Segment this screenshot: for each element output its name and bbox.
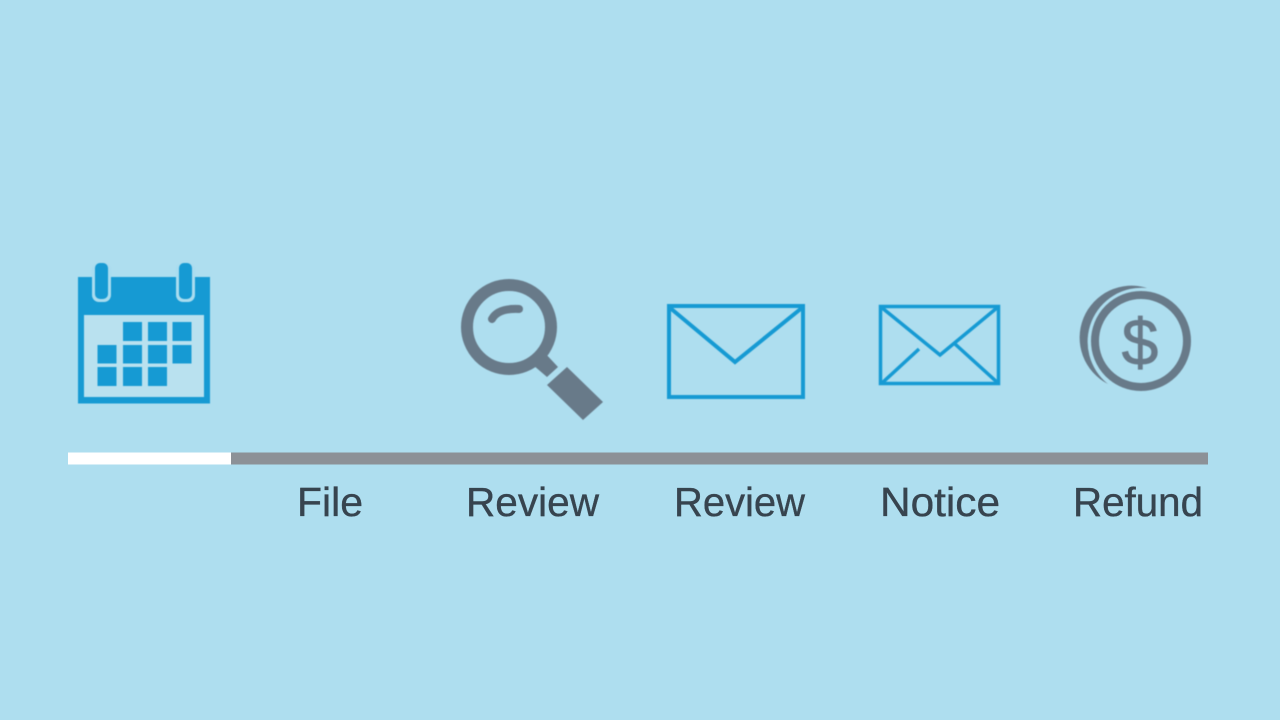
label: File: File <box>297 479 363 525</box>
icon: magnifying glass <box>467 285 603 420</box>
icon: small envelope <box>880 306 998 384</box>
label: Review: Review <box>466 479 599 525</box>
label: Notice: Notice <box>880 479 1000 525</box>
icon: dollar coins: $ <box>1122 305 1158 379</box>
label: Review: Review <box>674 479 805 525</box>
icon: large envelope <box>669 306 803 397</box>
icon: dollar coins <box>1080 286 1187 387</box>
label: Refund: Refund <box>1073 479 1203 525</box>
icon: calendar <box>78 263 210 404</box>
timeline progress bar <box>68 452 1208 464</box>
